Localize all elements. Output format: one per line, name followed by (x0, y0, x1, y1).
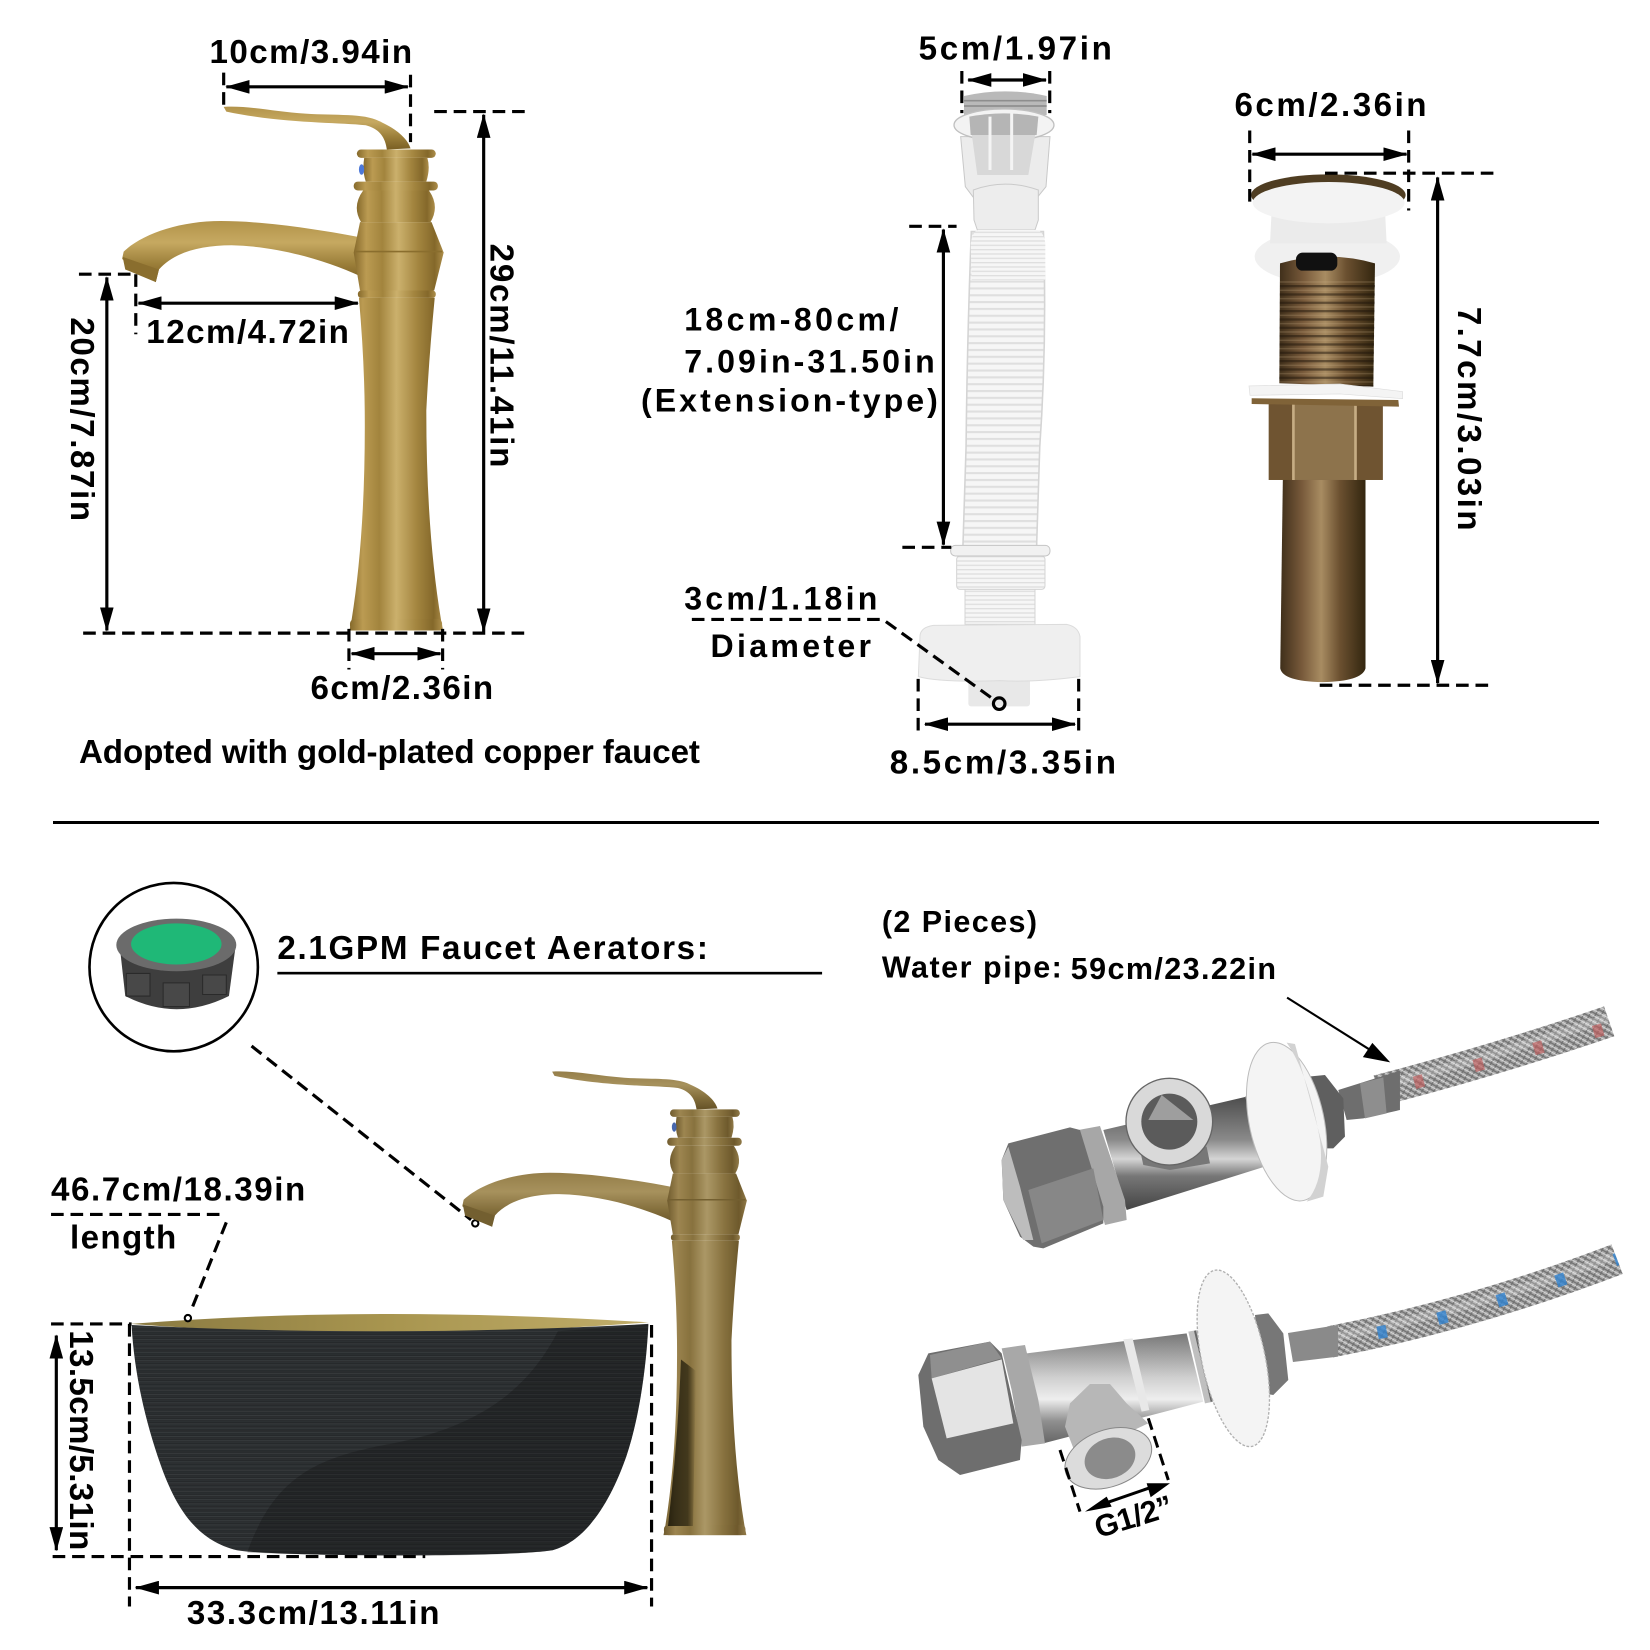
faucet collar line (356, 250, 442, 253)
label: faucet height: 29cm/11.41in (483, 244, 520, 467)
drain tube illustration (918, 91, 1080, 706)
pipes heading (882, 905, 1276, 986)
panel: faucet dimensions (63, 34, 700, 771)
label: length word: length (70, 1220, 176, 1257)
spout nozzle (123, 257, 159, 282)
label: top width: 5cm/1.97in (919, 30, 1112, 67)
label: spout reach: 12cm/4.72in (146, 314, 349, 351)
dimension lines (79, 73, 532, 669)
panel: pop-up drain (1234, 87, 1500, 685)
aerator heading: 2.1GPM Faucet Aerators: (277, 930, 708, 967)
lower braided hose (1330, 1255, 1617, 1342)
faucet spout (122, 221, 361, 282)
label: hose length: 18cm-80cm/ (684, 302, 898, 338)
label: handle length: 10cm/3.94in (209, 34, 412, 71)
sink dimension lines (51, 1214, 652, 1607)
drain threaded top (1249, 174, 1406, 407)
panel: extension drain tube (641, 30, 1116, 782)
panel: water pipes (882, 905, 1617, 1545)
label: fitting size: G1/2” (1090, 1489, 1177, 1545)
label: base width: 6cm/2.36in (311, 670, 493, 707)
label: hose length: (Extension-type) (641, 383, 938, 419)
label: sink length: 46.7cm/18.39in (51, 1171, 305, 1208)
drain lower tube (1280, 476, 1366, 682)
pop-up drain dimension lines (1250, 131, 1500, 685)
divider (53, 821, 1599, 824)
corrugated hose (963, 232, 1045, 547)
faucet base ring (350, 619, 442, 631)
label: sink width: 33.3cm/13.11in (187, 1595, 439, 1632)
pipes heading: 59cm/23.22in (1071, 952, 1276, 986)
icon: aerator (116, 919, 236, 1009)
faucet stem (349, 298, 443, 631)
fitting dimension (1060, 1418, 1170, 1512)
pipes heading: Water pipe: (882, 951, 1062, 985)
lower ribbed fitting and cap (918, 545, 1080, 706)
drain dimension lines (692, 71, 1079, 734)
clear strainer top (954, 91, 1054, 280)
caption: faucet material: Adopted with gold-plated copper faucet (79, 734, 700, 771)
label: hose length: 7.09in-31.50in (684, 344, 935, 380)
label: drain height: 7.7cm/3.03in (1450, 307, 1487, 531)
label: drain width: 6cm/2.36in (1234, 87, 1427, 124)
label: spout height: 20cm/7.87in (63, 317, 100, 521)
drain hex nut (1269, 401, 1383, 480)
faucet head (354, 149, 444, 298)
label: diameter (684, 580, 877, 664)
aerator circle (89, 883, 258, 1051)
faucet on sink (462, 1071, 747, 1535)
pipe pointer arrow (1287, 998, 1390, 1062)
blue indicator (359, 164, 364, 175)
sink basin (131, 1314, 648, 1556)
panel: sink and aerator (51, 883, 822, 1632)
aerator callout (89, 883, 258, 1051)
label: bottom width: 8.5cm/3.35in (890, 745, 1116, 782)
aerator pointer (252, 1046, 478, 1227)
label: diameter: 3cm/1.18in (684, 580, 877, 616)
label: hose length (641, 302, 938, 419)
pop-up drain illustration (1249, 174, 1406, 682)
heading underline (277, 972, 822, 974)
upper valve (1002, 1035, 1400, 1248)
label: diameter: Diameter (711, 628, 871, 664)
faucet illustration (122, 107, 444, 631)
lower valve (918, 1264, 1338, 1500)
pipes heading: (2 Pieces) (882, 905, 1037, 939)
label: sink height: 13.5cm/5.31in (62, 1330, 99, 1550)
upper braided hose (1378, 1017, 1609, 1091)
faucet handle (224, 107, 411, 149)
